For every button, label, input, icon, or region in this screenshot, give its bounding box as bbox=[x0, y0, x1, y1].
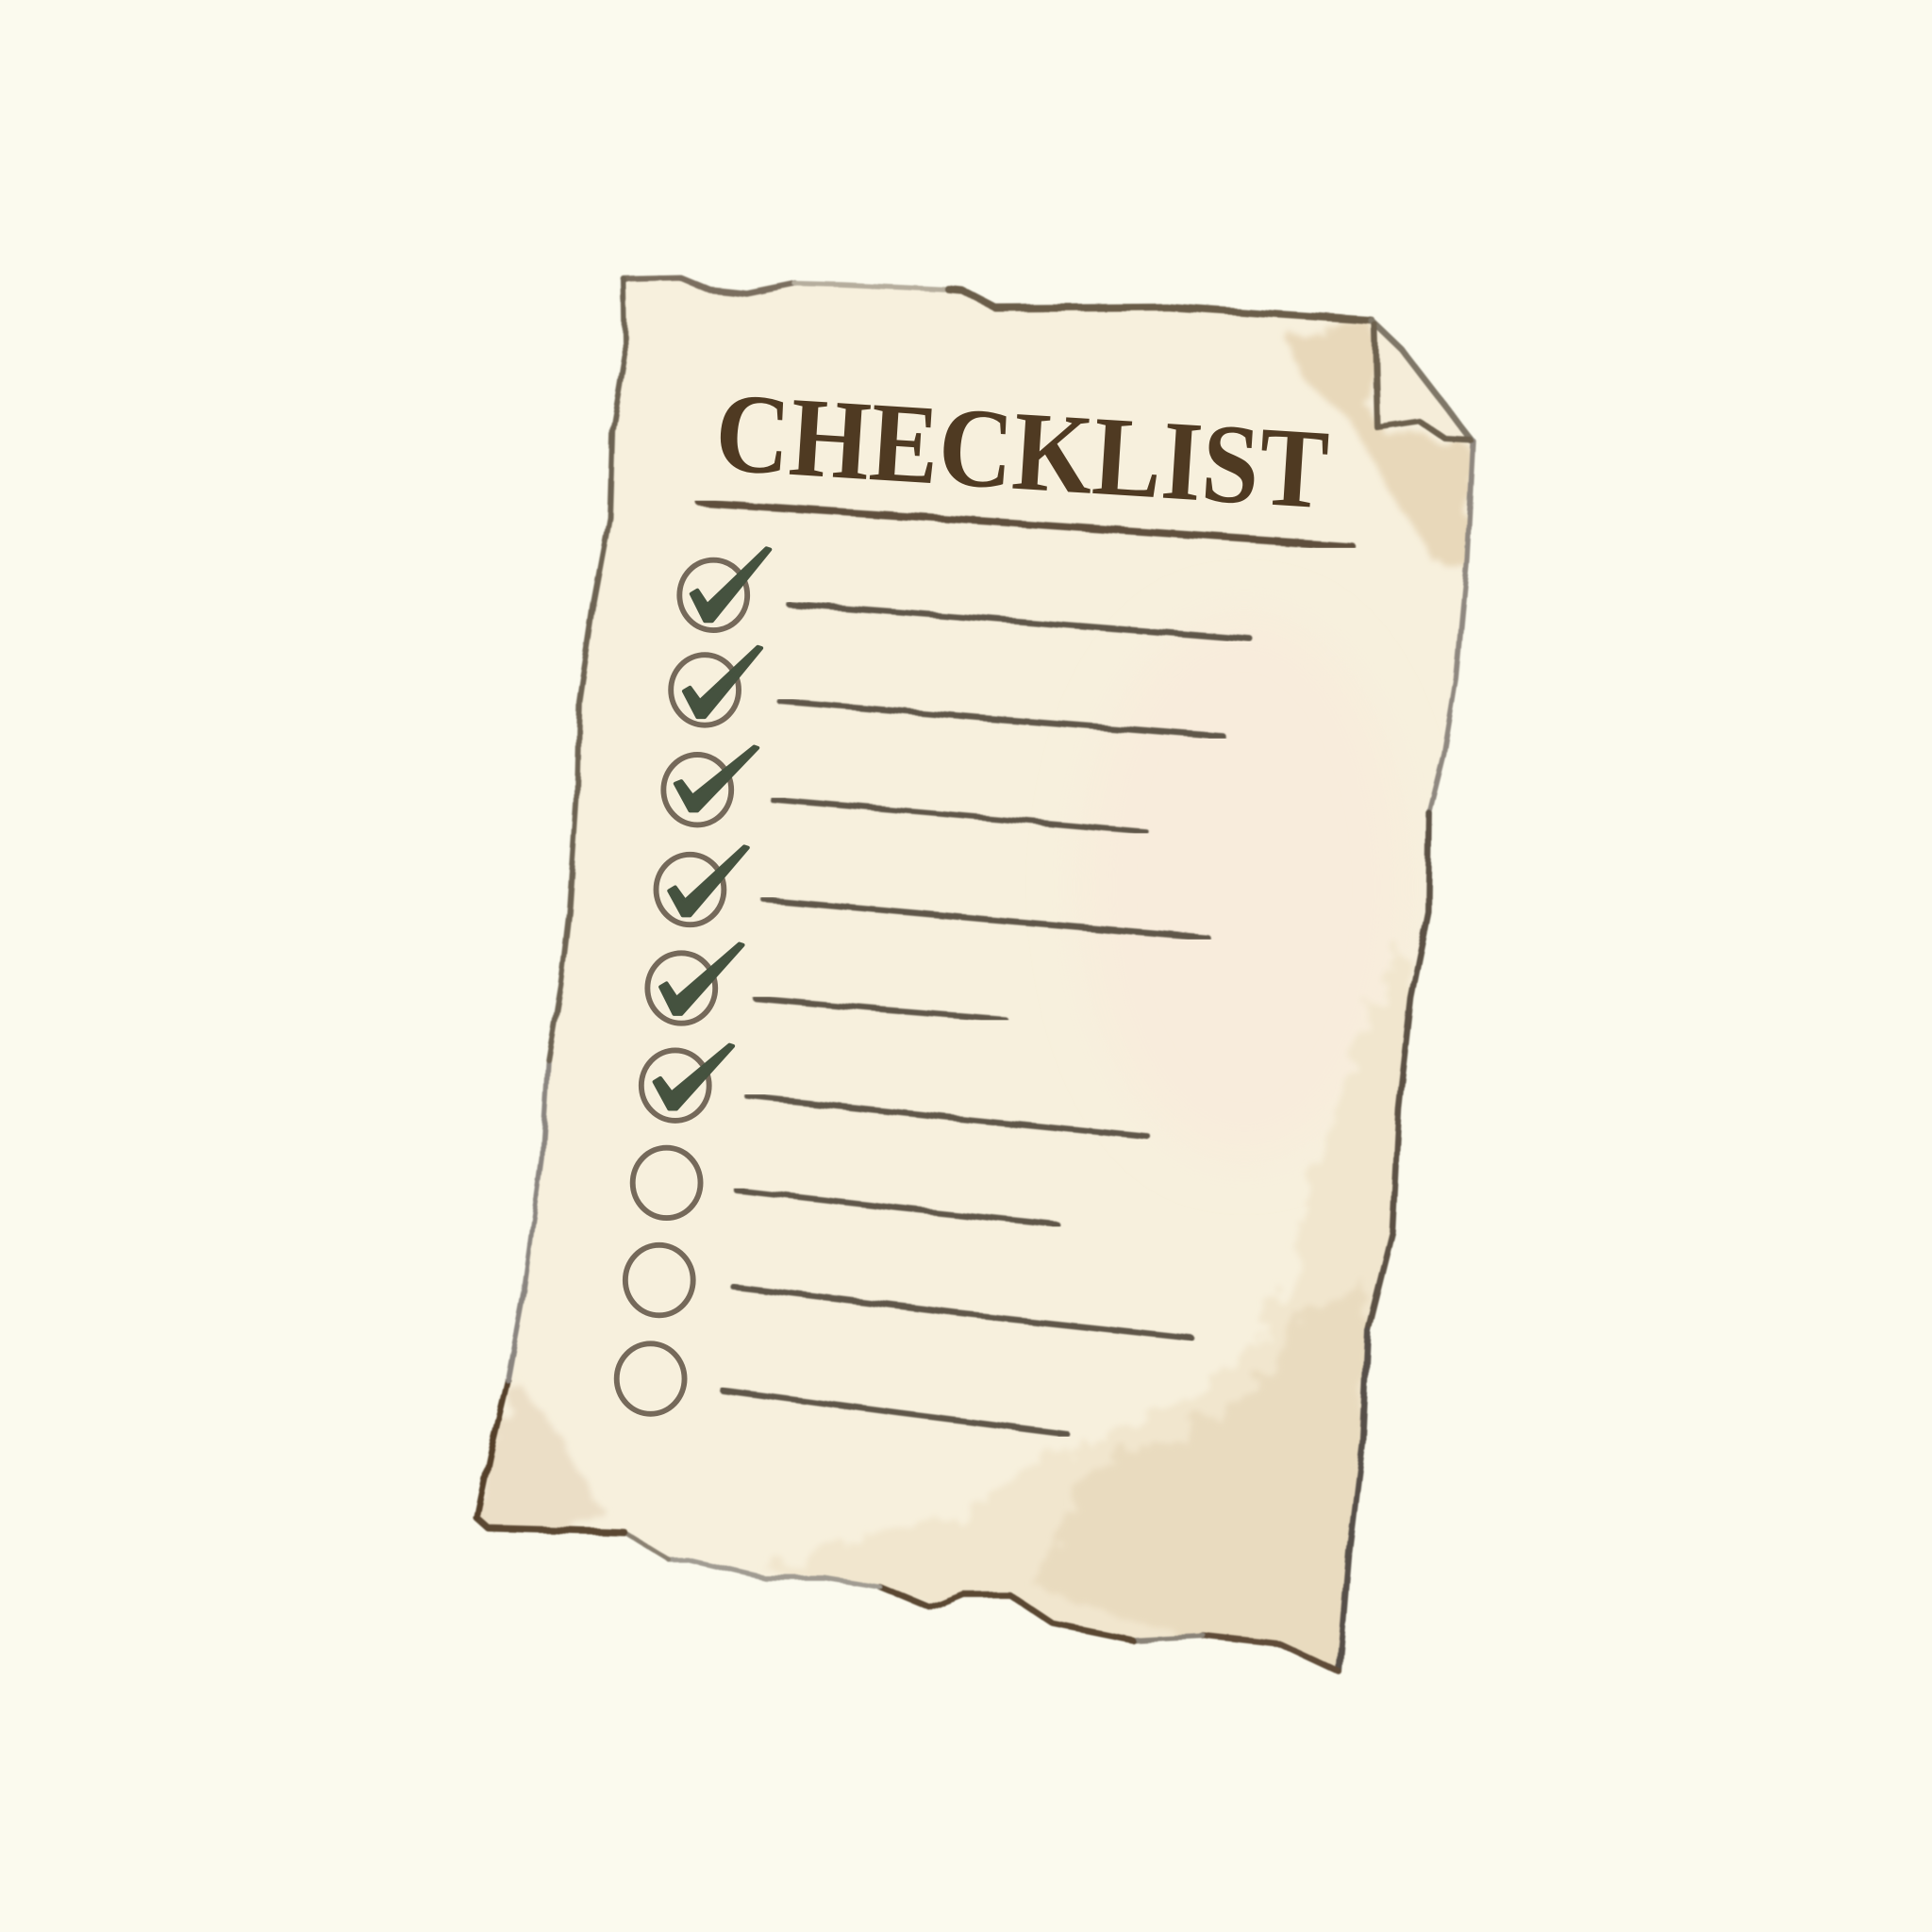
paper outline bbox=[476, 277, 1474, 1672]
item 6: checked bbox=[641, 1045, 1148, 1138]
item 8: unchecked bbox=[625, 1245, 1191, 1338]
checklist rows bbox=[617, 548, 1251, 1434]
illustration: torn paper checklist bbox=[472, 274, 1477, 1675]
panel: paper sheet bbox=[475, 277, 1474, 1688]
paper fill bbox=[476, 277, 1473, 1672]
header rule bbox=[700, 503, 1352, 546]
paper stains bbox=[475, 323, 1473, 1688]
item 4: checked bbox=[657, 846, 1208, 938]
item 7: unchecked bbox=[633, 1148, 1058, 1224]
item 1: checked bbox=[679, 548, 1251, 640]
item 2: checked bbox=[671, 647, 1224, 737]
title: CHECKLIST bbox=[712, 369, 1332, 533]
item 3: checked bbox=[663, 747, 1146, 832]
icon: folded corner bbox=[1375, 325, 1472, 441]
item 9: unchecked bbox=[617, 1343, 1067, 1434]
item 5: checked bbox=[647, 943, 1004, 1024]
